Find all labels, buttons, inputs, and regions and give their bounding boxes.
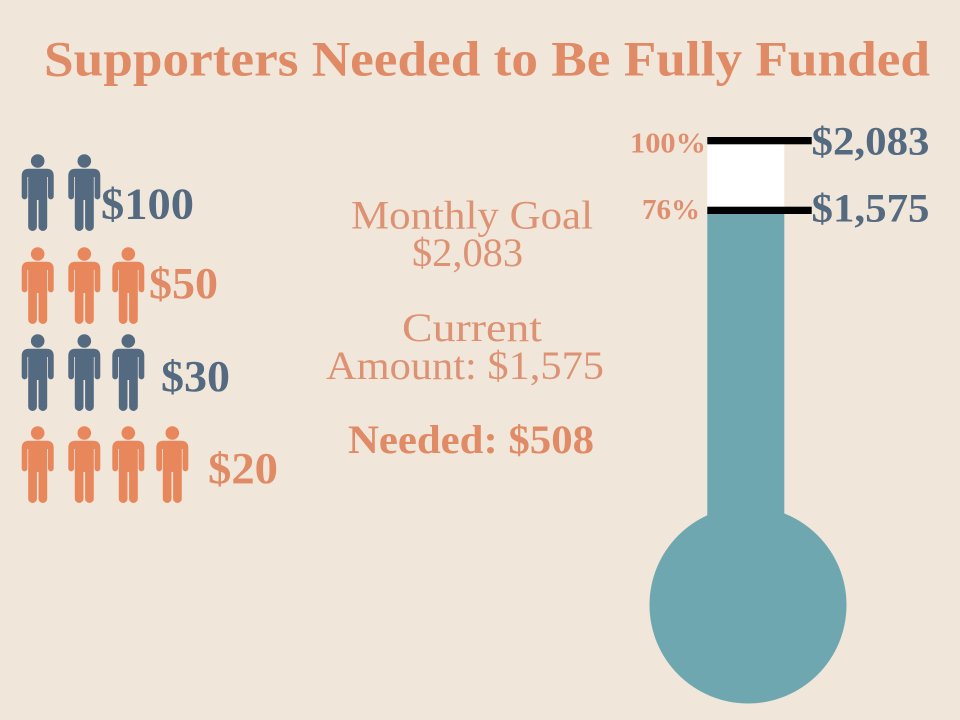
row: $50 supporters: [22, 247, 218, 324]
row: $100 supporters: $100: [101, 180, 194, 228]
row: $20 supporters: $20: [208, 444, 278, 493]
text: monthly goal: $2,083: [412, 230, 523, 275]
text: current amount: Current: [402, 305, 542, 350]
marker: 100%: [707, 137, 812, 144]
row: $100 supporters: [22, 154, 194, 231]
value: $2,083: $2,083: [812, 118, 930, 164]
row: $30 supporters: [22, 334, 230, 411]
label: 100%: 100%: [630, 128, 706, 160]
thermometer: [650, 137, 846, 704]
text: current amount: [326, 305, 604, 388]
text: current amount: Amount: $1,575: [326, 343, 604, 388]
row: $50 supporters: $50: [149, 259, 218, 308]
text: amount needed: Needed: $508: [348, 417, 594, 462]
text: monthly goal: [351, 192, 593, 275]
thermometer empty portion: [707, 141, 784, 213]
row: $20 supporters: [22, 426, 278, 503]
title: Supporters Needed to Be Fully Funded: [44, 30, 930, 86]
value: $1,575: $1,575: [812, 186, 930, 230]
text: monthly goal: Monthly Goal: [351, 192, 593, 238]
thermometer fill and bulb: [650, 212, 846, 704]
label: 76%: 76%: [642, 194, 700, 226]
row: $30 supporters: $30: [161, 352, 230, 401]
marker: 76%: [707, 207, 812, 214]
